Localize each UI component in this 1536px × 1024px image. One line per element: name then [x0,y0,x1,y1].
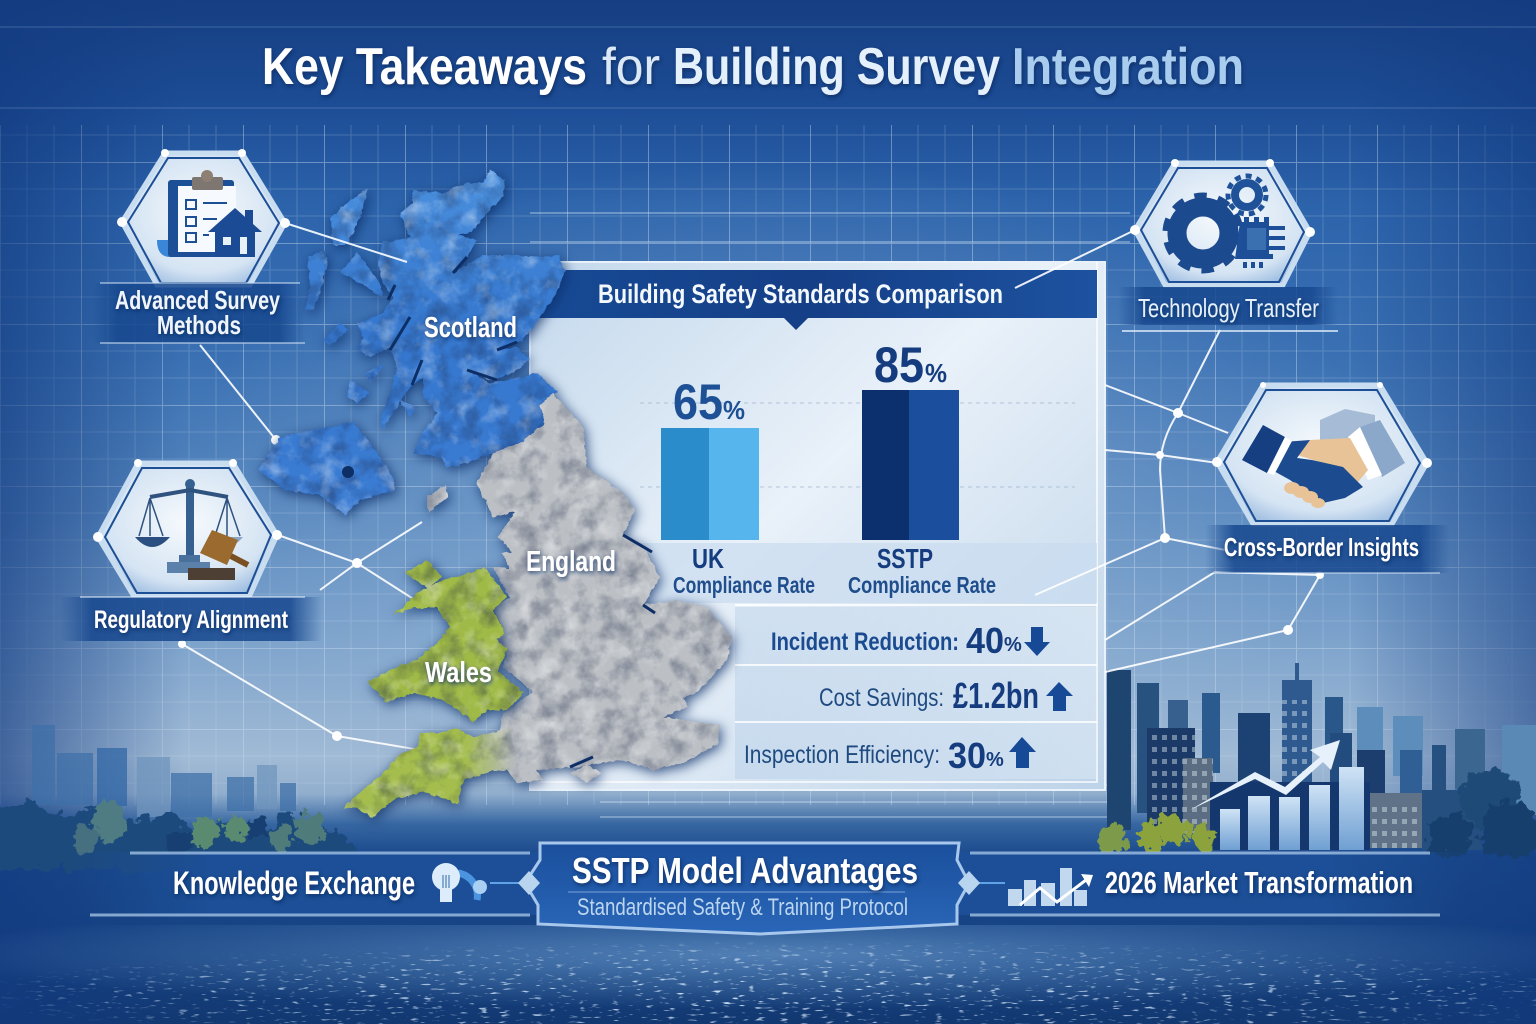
region labels: Scotland [424,312,517,344]
skyline: right [1107,663,1536,850]
England [343,393,732,818]
stat: cost savings: £1.2bn [953,675,1039,716]
bar: SSTP: Compliance Rate [848,572,996,598]
hexagon nodes: regulatory [93,459,282,542]
icon: regulatory scales hexagon [98,463,277,595]
hexagon nodes: handshake [1212,382,1432,468]
label: cross-border insights: Cross-Border Insights [1224,532,1419,562]
region labels [424,312,616,689]
title [262,38,1244,96]
label: advanced survey methods: Advanced Survey [115,285,280,315]
bar: UK: % [723,395,745,425]
bar: UK: UK [692,543,724,574]
connector network [182,230,1320,750]
bar: SSTP: SSTP [877,543,933,574]
stat: inspection efficiency [744,735,1036,776]
bar: UK [661,374,815,598]
Scottish sea lochs [388,257,517,385]
label: advanced survey methods [92,283,305,343]
Scotland [258,170,565,515]
stat: inspection efficiency: 30 [948,735,986,776]
label: advanced survey methods: Methods [157,310,241,340]
central badge: SSTP: Standardised Safety & Training Protocol [577,894,908,921]
label: technology transfer: Technology Transfer [1138,293,1319,323]
region labels: Wales [425,657,492,689]
bar: SSTP: % [925,358,947,388]
title: Key Takeaways [262,38,587,96]
hexagon nodes: survey [117,149,290,228]
stat: incident reduction [771,620,1050,661]
trees: left [0,802,365,870]
stat: incident reduction: Incident Reduction: [771,628,959,656]
water [0,925,1536,1024]
bar: UK: 65 [673,374,723,430]
stat: incident reduction: 40 [966,620,1004,661]
skyline: left [32,725,296,817]
panel heading: Building Safety Standards Comparison [598,279,1003,309]
Wales [367,560,523,722]
stat: cost savings [819,675,1073,716]
growth chart illustration [1190,740,1364,850]
trees: right [1098,770,1536,860]
title: for [602,38,660,96]
region labels: England [526,546,616,578]
stat: inspection efficiency: % [986,749,1004,771]
connector: survey hexagon to Scotland [285,223,407,262]
icon: survey methods hexagon [122,153,285,285]
stat: inspection efficiency: Inspection Efficiency: [744,741,940,769]
Lough Neagh [342,466,354,478]
bar: SSTP [848,337,996,598]
map of the UK [258,170,732,818]
stat: incident reduction: % [1004,634,1022,656]
connector nodes [178,408,1324,741]
label: technology transfer [1118,287,1338,331]
icon: technology gears hexagon [1135,163,1310,285]
English estuaries [570,535,655,767]
hexagon nodes: technology [1130,159,1315,237]
bar: UK: Compliance Rate [673,572,815,598]
panel heading [530,270,1097,330]
label: market transformation: 2026 Market Transformation [1105,865,1413,900]
stat: cost savings: Cost Savings: [819,684,944,712]
title: Integration [1012,38,1244,96]
central badge: SSTP [518,843,980,934]
label: regulatory alignment: Regulatory Alignment [94,606,288,634]
icon: market chart [1008,868,1093,906]
label: regulatory alignment [60,597,322,641]
icon: handshake hexagon [1217,385,1427,524]
panel body [530,262,1105,790]
central badge: SSTP: SSTP Model Advantages [572,850,918,891]
panel: comparison [530,262,1105,790]
bottom ribbon [70,843,1470,934]
icon: lightbulb [432,863,487,902]
label: cross-border insights [1205,525,1450,573]
bar: SSTP: 85 [874,337,924,393]
title: Building Survey [673,38,1000,96]
label: knowledge exchange: Knowledge Exchange [173,865,415,901]
